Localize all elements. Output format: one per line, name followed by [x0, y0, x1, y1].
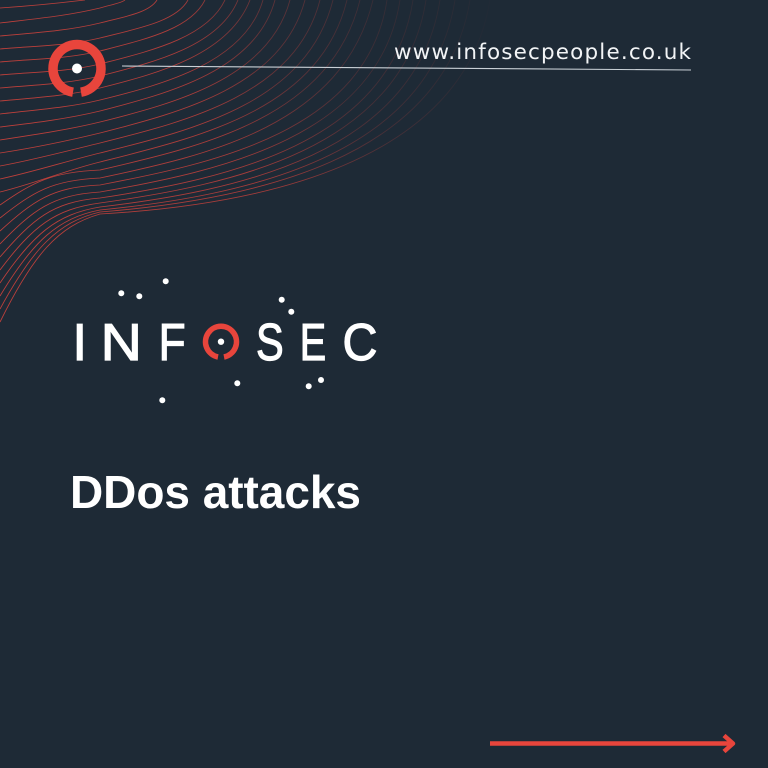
- logo wordmark: I: [72, 314, 87, 372]
- website url: www.infosecpeople.co.uk: [394, 40, 692, 65]
- header rule: [122, 66, 691, 70]
- infosec logo: [72, 278, 378, 403]
- title: DDos attacks: [70, 466, 361, 518]
- logo wordmark: F: [159, 314, 186, 372]
- icon: top logo ring: [53, 45, 101, 92]
- logo wordmark: S: [256, 314, 284, 372]
- logo scattered dots: [118, 278, 324, 403]
- icon: logo letter O ring: [206, 326, 236, 357]
- arrow: [490, 736, 733, 752]
- logo wordmark: N: [101, 314, 142, 372]
- wave line pattern: [0, 0, 768, 322]
- logo wordmark: C: [342, 314, 378, 372]
- logo wordmark: [72, 314, 378, 372]
- logo wordmark: E: [300, 314, 326, 372]
